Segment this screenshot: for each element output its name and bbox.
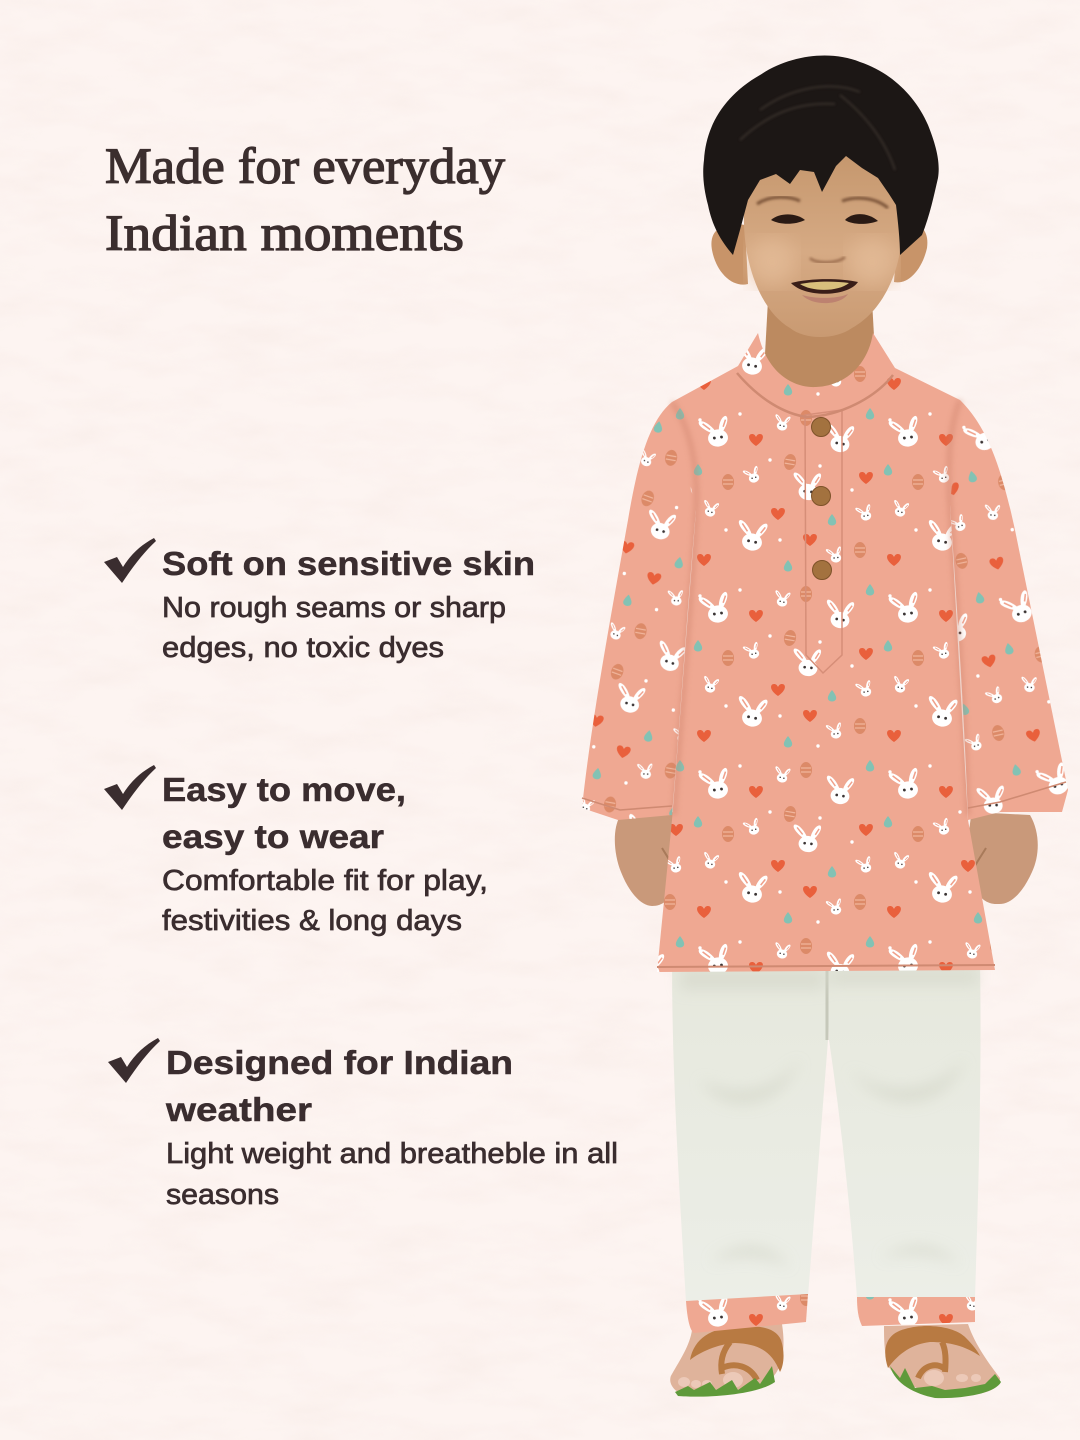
photo: smiling boy in bunny print kurta (582, 56, 1068, 1398)
feature description: No rough seams or sharp (162, 592, 506, 624)
title: Made for everyday (105, 139, 506, 195)
collar (737, 373, 893, 417)
feature description: seasons (166, 1179, 279, 1211)
ears (711, 223, 927, 285)
feature description (162, 865, 488, 937)
kurta body (657, 333, 995, 972)
feature heading: Easy to move, (162, 771, 406, 808)
title: Indian moments (105, 206, 464, 262)
icon: check mark (108, 1038, 160, 1083)
feature heading: Soft on sensitive skin (162, 545, 535, 582)
icon: check mark (104, 538, 156, 583)
feature description: edges, no toxic dyes (162, 632, 444, 664)
feature description: Light weight and breatheble in all (166, 1138, 618, 1170)
feature description: festivities & long days (162, 905, 462, 937)
face (744, 148, 902, 337)
icon: check mark (104, 765, 156, 810)
feature heading (165, 1044, 513, 1128)
feature: designed for indian weather (108, 1038, 618, 1211)
feature: soft on sensitive skin (104, 538, 535, 664)
feature heading: weather (165, 1091, 312, 1128)
feature description: Comfortable fit for play, (162, 865, 488, 897)
pants (672, 962, 981, 1302)
feature description (166, 1138, 618, 1211)
placket and buttons (805, 410, 842, 673)
eyes (771, 214, 878, 224)
right sleeve (949, 400, 1068, 820)
pant cuffs (686, 1294, 975, 1333)
feature description (162, 592, 506, 664)
eyebrows (757, 197, 888, 208)
neck (764, 300, 876, 389)
left foot (670, 1324, 784, 1394)
title (105, 139, 506, 262)
feature heading: easy to wear (162, 818, 384, 855)
feature: easy to move (104, 765, 488, 937)
feature heading (162, 771, 406, 855)
feet and sandals (670, 1324, 1001, 1398)
right foot (884, 1324, 1000, 1396)
kurta with bunny print (582, 333, 1068, 972)
hands (615, 812, 1038, 906)
nose (810, 257, 845, 262)
left sleeve (582, 402, 697, 820)
hair (703, 56, 939, 255)
smile (791, 279, 858, 303)
feature heading: Designed for Indian (166, 1044, 513, 1081)
